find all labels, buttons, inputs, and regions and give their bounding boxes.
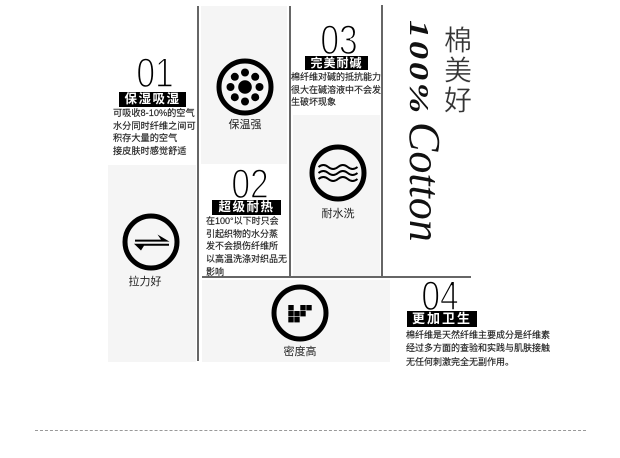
text 02: 在100°以下时只会 xyxy=(206,216,279,226)
dashed footer line xyxy=(35,430,586,431)
caption: tensile: 拉力好 xyxy=(128,276,162,288)
title: 100% Cotton rotated xyxy=(400,20,449,242)
left vertical rule xyxy=(197,6,199,361)
text 03: 生破坏现象 xyxy=(291,97,336,107)
middle vertical rule xyxy=(289,6,291,277)
text 03: 棉纤维对碱的抵抗能力 xyxy=(291,72,381,82)
text 02: 影响 xyxy=(206,267,224,277)
number 01: 01 xyxy=(136,49,174,96)
text 04: 无任何刺激完全无副作用。 xyxy=(406,356,514,366)
horizontal rule xyxy=(202,276,471,278)
text 01: 积存大量的空气 xyxy=(113,133,177,143)
block 03 xyxy=(291,16,381,107)
panel: tensile xyxy=(108,165,196,362)
text 04: 经过多方面的查验和实践与肌肤接触 xyxy=(406,343,550,353)
caption: density: 密度高 xyxy=(284,346,316,358)
text 02: 以高温洗涤对织品无 xyxy=(206,254,287,264)
text 02 xyxy=(206,216,287,277)
text 01: 接皮肤时感觉舒适 xyxy=(113,146,186,156)
panel: density xyxy=(202,280,390,362)
title: 100% Cotton rotated: Cotton xyxy=(400,122,449,242)
icon: tensile arrows xyxy=(122,214,180,270)
title: 100% Cotton rotated: 100% xyxy=(404,20,434,116)
heading 01: 保湿吸湿 xyxy=(124,92,180,106)
block 02 xyxy=(206,160,287,277)
number 04: 04 xyxy=(421,272,459,319)
text 02: 发不会损伤纤维所 xyxy=(206,241,278,251)
text 01 xyxy=(113,108,196,156)
panel: washable xyxy=(293,115,380,276)
number 03: 03 xyxy=(320,16,358,63)
text 03: 很大在碱溶液中不会发 xyxy=(291,85,381,95)
text 03 xyxy=(291,72,381,107)
text 04: 棉纤维是天然纤维主要成分是纤维素 xyxy=(406,330,550,340)
heading 04: 更加卫生 xyxy=(412,311,472,326)
title: vertical Chinese: 好 xyxy=(444,85,472,116)
block 01 xyxy=(113,49,196,156)
text 04 xyxy=(406,330,550,366)
right vertical rule xyxy=(381,5,383,277)
title: vertical Chinese: 美 xyxy=(444,55,472,86)
number 02: 02 xyxy=(231,160,269,207)
caption: washable: 耐水洗 xyxy=(322,208,354,220)
block 04 xyxy=(406,272,550,366)
text 01: 水分同时纤维之间可 xyxy=(113,121,196,131)
heading 02: 超级耐热 xyxy=(218,200,274,214)
icon: water waves xyxy=(310,144,366,202)
heading 03: 完美耐碱 xyxy=(310,56,362,70)
icon: density squares xyxy=(272,284,328,342)
title: vertical Chinese xyxy=(444,25,472,116)
text 01: 可吸收8-10%的空气 xyxy=(113,108,195,118)
text 02: 引起织物的水分蒸 xyxy=(206,229,278,239)
panel: warmth xyxy=(201,6,287,164)
title: vertical Chinese: 棉 xyxy=(444,25,472,56)
icon: warmth flower xyxy=(216,58,274,116)
caption: warmth: 保温强 xyxy=(228,119,262,131)
